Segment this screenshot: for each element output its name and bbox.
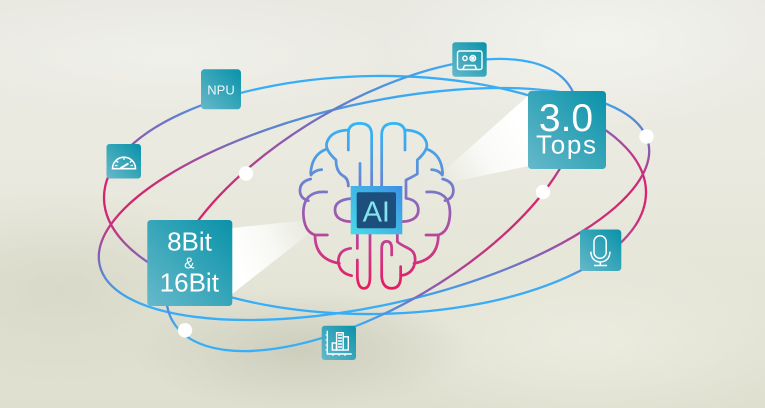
bit depth tile: 16Bit bbox=[160, 267, 220, 297]
icon: cassette tape bbox=[458, 51, 482, 70]
bit depth tile: & bbox=[184, 256, 195, 273]
NPU tile bbox=[201, 69, 241, 109]
icon: speedometer bbox=[112, 157, 136, 169]
AI chip bbox=[351, 186, 402, 234]
brain left hemisphere bbox=[300, 123, 372, 288]
brain right hemisphere bbox=[382, 123, 453, 288]
brain bbox=[300, 123, 453, 288]
white node dots bbox=[178, 129, 654, 337]
AI chip: AI bbox=[363, 196, 390, 228]
chart tile bbox=[322, 326, 356, 360]
orbit rings bbox=[99, 59, 649, 351]
orbit ring C bbox=[166, 59, 578, 351]
microphone tile bbox=[580, 230, 621, 271]
orbit ring A bbox=[104, 76, 646, 314]
light beam: tops to brain bbox=[447, 95, 529, 183]
icon: microphone bbox=[591, 236, 610, 266]
tops tile: Tops bbox=[536, 130, 596, 160]
gauge tile bbox=[106, 144, 141, 178]
icon: bar chart bbox=[326, 331, 352, 356]
NPU tile: NPU bbox=[207, 82, 235, 97]
orbit ring B bbox=[99, 88, 649, 320]
bit depth tile: 8Bit bbox=[167, 226, 213, 256]
bit depth tile bbox=[147, 220, 232, 306]
tops tile: 3.0 bbox=[539, 97, 593, 140]
tops tile bbox=[528, 91, 606, 169]
light beam: bit depth to brain bbox=[232, 220, 310, 294]
cassette tile bbox=[452, 42, 487, 77]
